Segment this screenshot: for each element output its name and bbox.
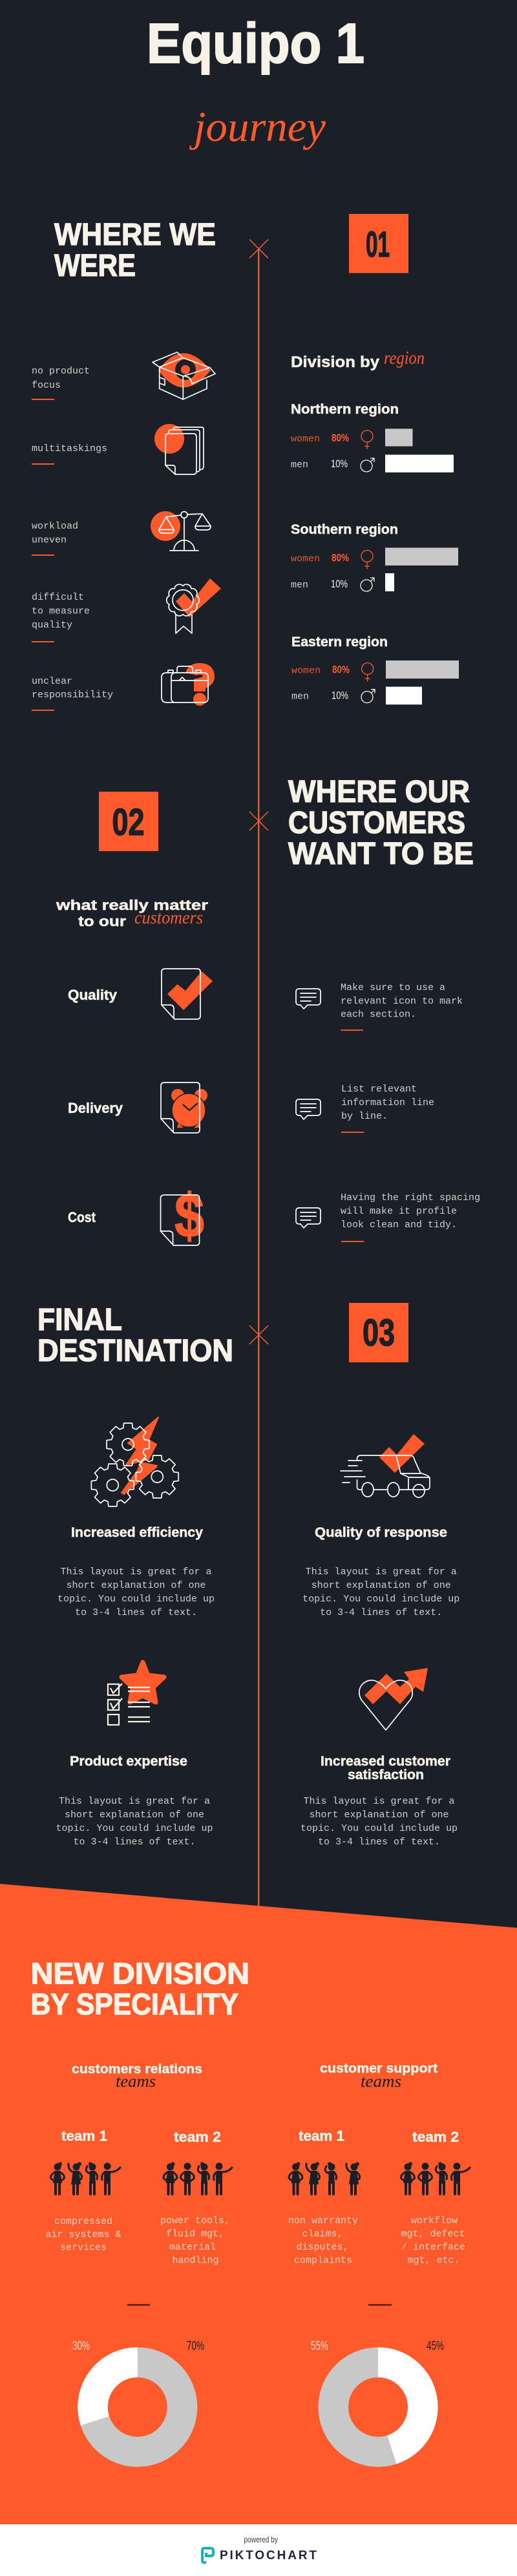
column: team 2 workflow: workflow [411,2215,458,2226]
row: delivery note: by line. [341,1111,388,1122]
text: difficult to measure quality [32,592,90,642]
row: quality [68,969,213,1019]
icon: checklist with star [108,1662,164,1725]
icon: documents [154,424,204,474]
text: unclear responsibility [32,676,113,711]
heading: final destination: FINAL [37,1303,122,1337]
row: delivery [68,1082,207,1133]
number badge 03 [349,1303,408,1362]
panel: increased efficiency: Increased efficiency [71,1525,203,1540]
heading: where we were [54,218,216,283]
panel: increased customer satisfaction: satisfaction [348,1768,424,1782]
column: team 1 compressed air: compressed [54,2216,112,2227]
heading: where we were: WHERE WE [54,218,216,252]
chart: southern region: 80% [332,552,349,564]
column: team 2 power tools [160,2129,232,2266]
chart: donut 30 / 70 [72,2339,204,2467]
title [147,12,364,151]
chart: eastern region: men [291,692,309,702]
chart: northern region: Northern region [291,402,399,417]
chart: donut 30 / 70: 70% [187,2339,204,2353]
icon: team figures [164,2162,232,2194]
chart: eastern region: Eastern region [291,635,388,649]
chart: southern region: Southern region [291,522,398,537]
panel: product expertise: short explanation of one [65,1810,204,1821]
column: team 2 power tools: team 2 [174,2129,221,2145]
panel: problem list [32,352,221,711]
row: cost note: Having the right spacing [341,1192,480,1203]
chart: donut 55 / 45 [311,2339,444,2467]
panel: increased customer satisfaction: This layout is great for a [303,1796,455,1807]
panel: increased efficiency: topic. You could include up [58,1594,215,1605]
icon: team figures [289,2162,359,2194]
subheading: what really matter to our customers [56,897,209,929]
column: team 2 power tools: power tools, [160,2215,230,2226]
icon: delivery van with check [341,1434,430,1497]
chart: southern region: 10% [331,578,348,590]
panel: quality of response: This layout is great for a [306,1567,457,1578]
row: quality note: relevant icon to mark [341,996,463,1007]
icon: briefcase with question mark [162,666,209,706]
text: difficult to measure quality: to measure [32,606,90,617]
subheading: customers relations teams [72,2062,202,2091]
subheading: customer support teams: teams [361,2072,401,2091]
row: delivery note: List relevant [341,1084,417,1095]
heading: where our customers want to be: WHERE OUR [288,775,470,809]
subheading: what really matter to our customers: what really matter [56,897,209,913]
title: Equipo 1 [147,12,364,75]
column: team 2 workflow: mgt, defect [401,2228,465,2240]
panel: product expertise: Product expertise [70,1754,187,1769]
text: no product focus: focus [32,380,61,391]
column: team 2 workflow: mgt, etc. [407,2255,460,2266]
heading: where our customers want to be: CUSTOMERS [288,806,465,840]
subheading: what really matter to our customers: to our [78,913,127,929]
column: team 1 compressed air [45,2127,121,2253]
panel: increased efficiency: This layout is great for a [60,1567,212,1578]
icon: team figures [51,2162,120,2194]
timeline with cross markers [249,239,268,1913]
text: workload uneven [32,521,78,556]
chart: northern region: women [291,434,320,445]
text: difficult to measure quality: quality [32,620,72,631]
icon: document with check [162,969,213,1019]
panel: quality of response: short explanation of one [311,1580,451,1591]
subheading: customers relations teams: customers relations [72,2062,202,2076]
footer: powered by [244,2535,278,2544]
chart: southern region: men [291,580,308,591]
number badge 02 [99,792,158,851]
subheading: customer support teams: customer support [320,2062,438,2076]
column: team 1 non warranty: team 1 [299,2127,344,2144]
heading: new division by speciality: BY SPECIALITY [31,1987,238,2021]
divider: right [368,2305,392,2306]
text: unclear responsibility: unclear [32,676,72,687]
column: team 1 non warranty: non warranty [288,2215,358,2226]
icon: box with eye [153,352,215,399]
chart: eastern region: 10% [332,690,348,702]
text: no product focus: no product [32,366,90,377]
heading: new division by speciality [31,1957,249,2021]
subheading: customers relations teams: teams [116,2072,156,2091]
chart: eastern region: 80% [332,663,350,676]
divider: left [127,2305,150,2306]
icon: gears with lightning [91,1417,178,1506]
number badge 02: 02 [112,801,145,843]
chart: southern region: women [291,553,320,565]
row: cost note: will make it profile [341,1206,457,1217]
row: delivery note [296,1084,434,1133]
chart: donut 55 / 45: 55% [311,2339,328,2353]
heading: division by region: region [384,348,425,368]
column: team 2 workflow: team 2 [412,2129,459,2145]
icon: document with dollar [160,1181,204,1251]
column: team 2 power tools: material [169,2242,216,2253]
column: team 2 power tools: handling [172,2255,219,2266]
panel: quality of response: topic. You could include up [302,1594,459,1605]
panel: quality of response: Quality of response [315,1525,447,1540]
text: multitaskings: multitaskings [32,443,107,454]
row: cost [68,1181,204,1251]
panel: product expertise: topic. You could include up [56,1823,213,1834]
column: team 2 power tools: fluid mgt, [166,2228,224,2240]
column: team 1 non warranty: complaints [294,2255,352,2266]
chart: donut 30 / 70: 30% [72,2339,90,2353]
chart: eastern region [291,635,459,704]
panel: orange background [0,1884,517,2524]
icon: heart with rising arrow [359,1668,428,1730]
panel: quality of response [302,1434,459,1618]
heading: final destination [37,1303,233,1368]
panel: increased efficiency [58,1417,215,1618]
panel: increased efficiency: short explanation of one [66,1580,206,1591]
icon: team figures [401,2162,470,2194]
panel: increased customer satisfaction: Increased customer [321,1754,450,1769]
number badge 01: 01 [366,224,390,264]
row: quality note: each section. [341,1009,416,1020]
panel: increased customer satisfaction: topic. You could include up [301,1823,458,1834]
column: team 1 compressed air: services [60,2243,107,2253]
icon: award with check [167,578,221,633]
panel: product expertise [56,1662,213,1848]
heading: final destination: DESTINATION [37,1334,233,1368]
panel: product expertise: This layout is great for a [59,1796,210,1807]
column: team 2 workflow: / interface [401,2242,465,2253]
panel: product expertise: to 3-4 lines of text. [73,1837,196,1848]
row: quality: Quality [68,987,118,1003]
row: quality note: Make sure to use a [341,982,445,993]
heading: division by region: Division by [291,354,380,371]
column: team 2 workflow [401,2129,470,2266]
footer: PIKTOCHART [220,2549,317,2562]
panel: quality of response: to 3-4 lines of text. [320,1607,442,1618]
column: team 1 non warranty: disputes, [296,2242,349,2253]
icon: document with alarm clock [161,1082,207,1133]
text: no product focus [32,366,90,400]
chart: northern region: 10% [331,458,348,470]
subheading: what really matter to our customers: customers [134,908,203,928]
number badge 01 [349,214,408,273]
row: quality note [296,982,463,1031]
panel: increased efficiency: to 3-4 lines of text. [75,1607,197,1618]
icon: piktochart logo [202,2548,213,2562]
panel: increased customer satisfaction: to 3-4 lines of text. [318,1837,440,1848]
panel: division by region [291,348,459,704]
footer [0,2524,517,2576]
chart: northern region: 80% [332,432,349,444]
column: team 1 compressed air: air systems & [45,2230,121,2240]
heading: where we were: WERE [54,249,136,283]
title: journey [189,103,326,151]
panel: increased customer satisfaction [301,1668,458,1848]
row: delivery: Delivery [68,1100,123,1116]
text: workload uneven: uneven [32,535,67,545]
row: cost note: look clean and tidy. [341,1219,457,1230]
row: delivery note: information line [341,1097,434,1108]
text: multitaskings [32,443,107,465]
column: team 1 compressed air: team 1 [61,2127,107,2144]
chart: northern region: men [291,459,308,470]
column: team 1 non warranty: claims, [302,2228,343,2240]
heading: new division by speciality: NEW DIVISION [31,1957,249,1990]
icon: document with dollar: $ [174,1181,204,1251]
heading: where our customers want to be: WANT TO BE [288,837,474,871]
chart: southern region [291,522,458,591]
row: cost note [296,1192,480,1242]
text: workload uneven: workload [32,521,78,532]
text: unclear responsibility: responsibility [32,690,113,701]
chart: eastern region: women [291,666,321,676]
panel: increased customer satisfaction: short explanation of one [309,1810,449,1821]
chart: donut 55 / 45: 45% [427,2339,444,2353]
chart: northern region [291,402,454,472]
icon: scales [151,511,211,551]
subheading: customer support teams [320,2062,438,2091]
column: team 1 non warranty [288,2127,359,2266]
number badge 03: 03 [363,1312,395,1354]
text: difficult to measure quality: difficult [32,592,84,603]
heading: where our customers want to be [288,775,474,871]
heading: division by region [291,348,425,371]
row: cost: Cost [68,1209,96,1225]
